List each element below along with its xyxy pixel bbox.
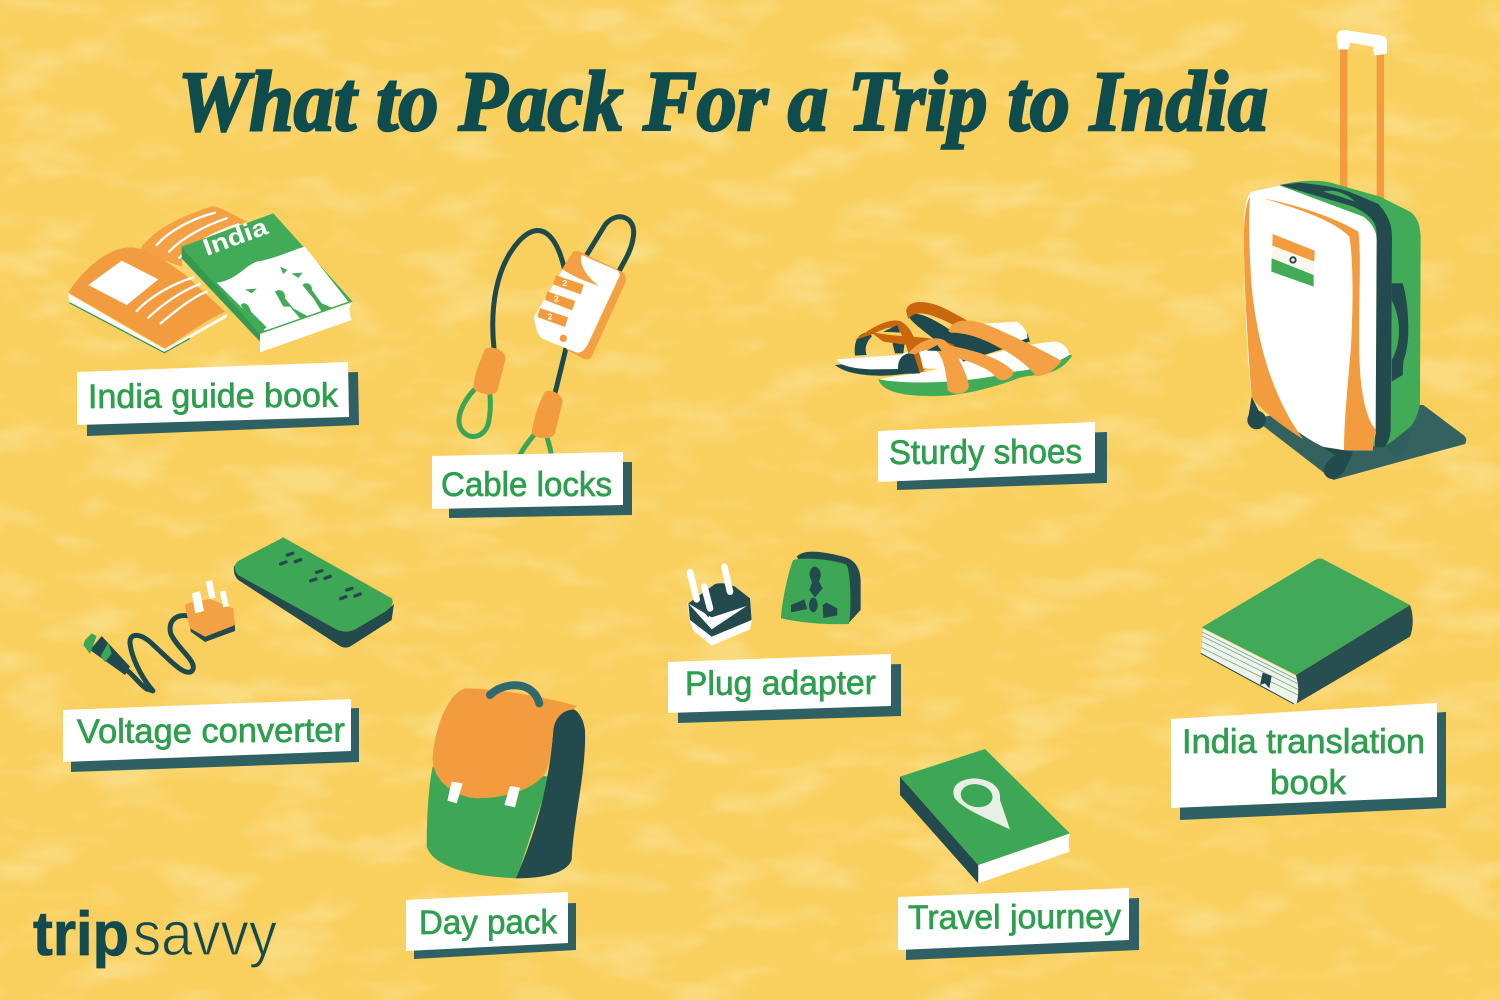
icon: day pack (427, 685, 585, 878)
icon: voltage converter (83, 537, 394, 691)
icon: suitcase (1244, 30, 1466, 480)
label: day pack (406, 892, 576, 959)
label: sturdy shoes: Sturdy shoes (889, 433, 1082, 472)
label: day pack: Day pack (419, 903, 558, 942)
icon: cable locks (459, 217, 634, 455)
label: india translation book: India translation (1182, 723, 1425, 761)
label: voltage converter: Voltage converter (77, 712, 345, 751)
cover title: India (199, 213, 272, 262)
logo: tripsavvy: savvy (133, 900, 277, 969)
icon: plug adapter (687, 552, 861, 646)
logo: tripsavvy: trip (33, 900, 129, 969)
logo: tripsavvy (33, 900, 277, 969)
label: plug adapter: Plug adapter (685, 664, 876, 703)
label: india guide book: India guide book (88, 377, 339, 416)
label: india guide book (77, 362, 359, 436)
icon: travel journey (900, 749, 1070, 883)
label: travel journey: Travel journey (908, 898, 1121, 937)
label: cable locks: Cable locks (441, 466, 612, 504)
label: voltage converter (63, 699, 359, 772)
label: cable locks (432, 452, 632, 518)
label: plug adapter (668, 654, 901, 723)
title: What to Pack For a Trip to India (178, 53, 1268, 149)
icon: india guide book (68, 206, 353, 353)
icon: cable locks: 2 (562, 278, 567, 288)
label: sturdy shoes (878, 422, 1107, 490)
label: india translation book (1171, 703, 1446, 820)
icon: sturdy shoes (835, 302, 1072, 396)
label: india translation book: book (1270, 764, 1347, 802)
icon: cable locks: 2 (548, 311, 553, 321)
icon: cable locks: 2 (554, 294, 559, 304)
icon: translation book (1201, 558, 1413, 704)
label: travel journey (898, 888, 1139, 960)
